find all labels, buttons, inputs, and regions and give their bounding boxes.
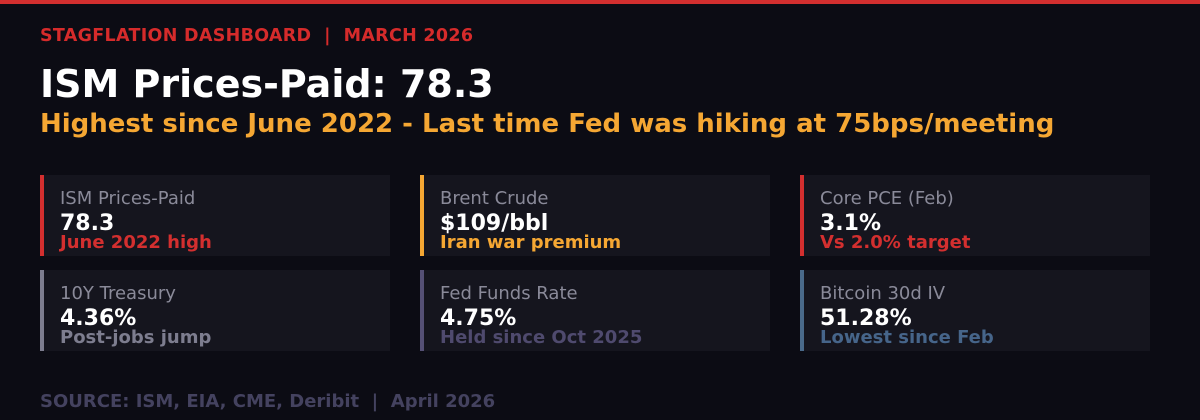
card: Fed Funds Rate: Held since Oct 2025 [440, 327, 642, 348]
card: Core PCE: Core PCE (Feb) [820, 188, 954, 209]
card: 10Y Treasury: Post-jobs jump [60, 327, 211, 348]
card: Fed Funds Rate [420, 270, 770, 351]
card: Bitcoin 30d IV [800, 270, 1150, 351]
header label: STAGFLATION DASHBOARD | MARCH 2026 [40, 26, 473, 46]
card: ISM Prices-Paid: ISM Prices-Paid [60, 188, 195, 209]
card: ISM Prices-Paid: 78.3 [60, 211, 114, 236]
card: Core PCE [800, 175, 1150, 256]
card: Bitcoin 30d IV: Bitcoin 30d IV [820, 283, 945, 304]
card: Core PCE: Vs 2.0% target [820, 232, 970, 253]
card: Fed Funds Rate: Fed Funds Rate [440, 283, 578, 304]
card: Bitcoin 30d IV: 51.28% [820, 306, 912, 331]
source footer: SOURCE: ISM, EIA, CME, Deribit | April 2026 [40, 391, 495, 412]
card: Brent Crude [420, 175, 770, 256]
card: Core PCE: 3.1% [820, 211, 881, 236]
card: Brent Crude: Brent Crude [440, 188, 548, 209]
card: Fed Funds Rate: 4.75% [440, 306, 516, 331]
card: 10Y Treasury [40, 270, 390, 351]
card: 10Y Treasury: 10Y Treasury [60, 283, 176, 304]
subtitle: Highest since June 2022 - Last time Fed was hiking at 75bps/meeting [40, 109, 1054, 139]
card: ISM Prices-Paid: June 2022 high [60, 232, 212, 253]
card: ISM Prices-Paid [40, 175, 390, 256]
card: Brent Crude: $109/bbl [440, 211, 548, 236]
card: 10Y Treasury: 4.36% [60, 306, 136, 331]
card: Brent Crude: Iran war premium [440, 232, 621, 253]
title: ISM Prices-Paid: 78.3 [40, 62, 494, 106]
card: Bitcoin 30d IV: Lowest since Feb [820, 327, 994, 348]
